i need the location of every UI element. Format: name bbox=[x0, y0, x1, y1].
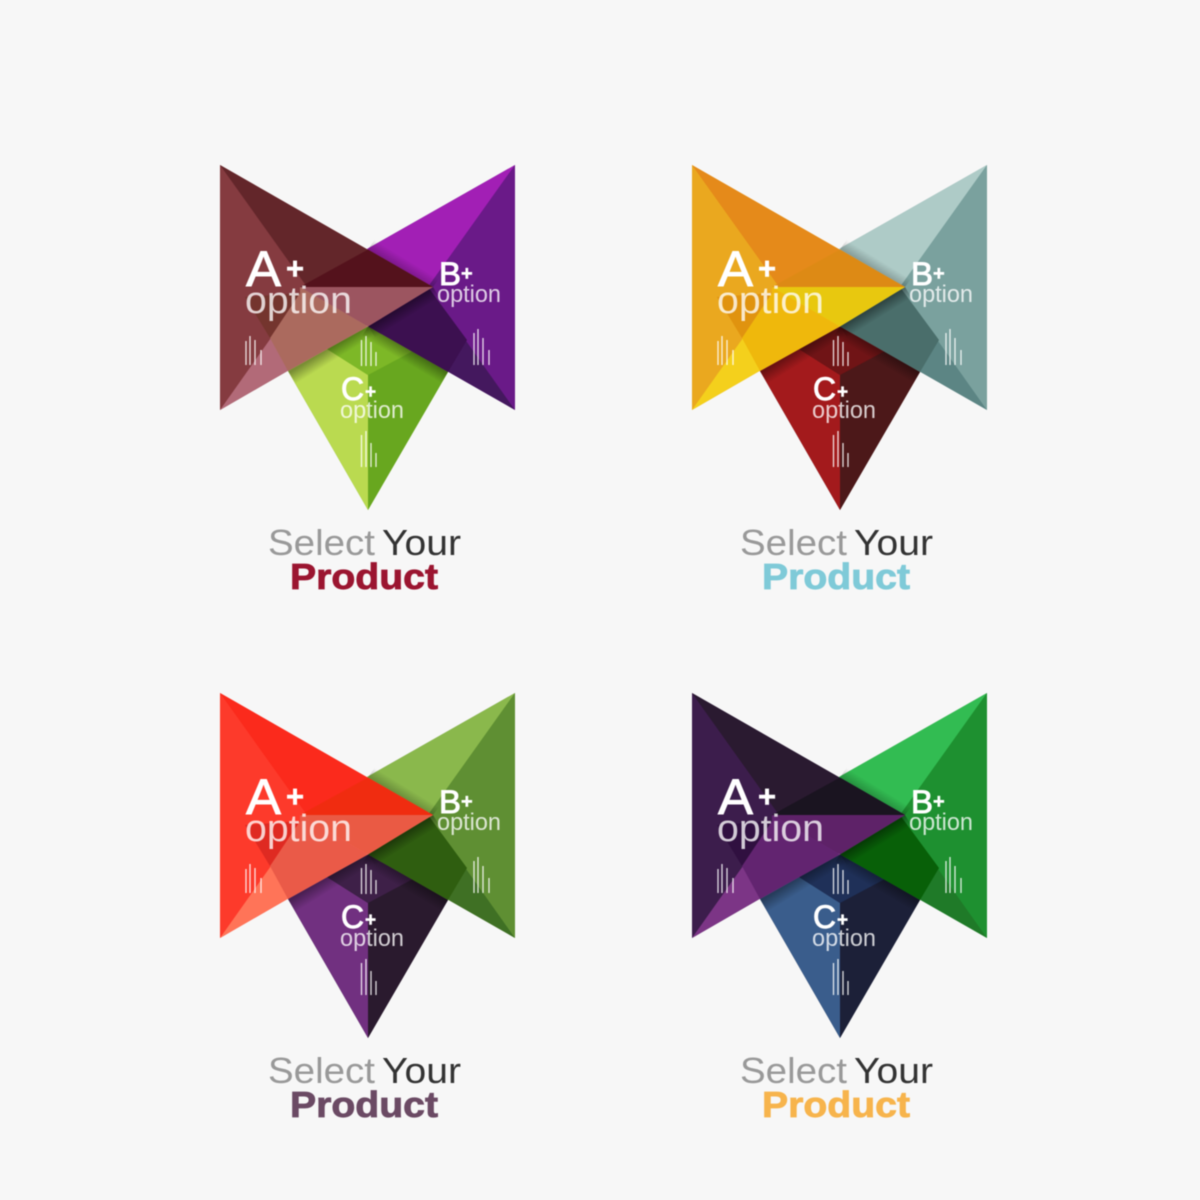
label: C+ option: option bbox=[812, 925, 876, 952]
label: C+ option: option bbox=[340, 397, 404, 424]
label: B+ option: option bbox=[909, 809, 973, 836]
mini bars: A bbox=[718, 336, 733, 365]
label: A+ option bbox=[717, 769, 824, 850]
mini bars: B bbox=[474, 329, 489, 365]
label: B+ option: B bbox=[911, 256, 933, 292]
label: C+ option bbox=[340, 371, 404, 424]
label: B+ option: B bbox=[439, 256, 461, 292]
label: A+ option: option bbox=[717, 280, 824, 322]
label: C+ option: C bbox=[813, 899, 836, 935]
label: A+ option: A bbox=[718, 241, 754, 297]
label: C+ option: option bbox=[812, 397, 876, 424]
label: A+ option bbox=[245, 241, 352, 322]
label: B+ option: + bbox=[461, 263, 473, 285]
label: A+ option: + bbox=[758, 251, 776, 286]
heading: Select Your Product: Your bbox=[854, 1050, 933, 1091]
label: B+ option bbox=[909, 784, 973, 836]
mini bars: A bbox=[246, 864, 261, 893]
panel: violet green blue option diagram bbox=[692, 693, 987, 1125]
label: A+ option: A bbox=[718, 769, 754, 825]
heading: Select Your Product: Select bbox=[268, 522, 375, 563]
heading: Select Your Product: Your bbox=[382, 522, 461, 563]
heading: Select Your Product: Select bbox=[740, 1050, 847, 1091]
diagram shapes: folded triangles bbox=[220, 693, 515, 1038]
panel: orange teal red option diagram bbox=[692, 165, 987, 597]
panel: maroon purple green option diagram bbox=[220, 165, 515, 597]
label: A+ option: + bbox=[286, 251, 304, 286]
label: C+ option: + bbox=[837, 910, 848, 931]
heading: Select Your Product: Select bbox=[740, 522, 847, 563]
label: B+ option: + bbox=[933, 791, 945, 813]
label: C+ option bbox=[812, 899, 876, 952]
label: A+ option bbox=[717, 241, 824, 322]
label: B+ option: option bbox=[909, 281, 973, 308]
diagram shapes: folded triangles bbox=[692, 165, 987, 510]
heading: Select Your Product: Select bbox=[268, 1050, 375, 1091]
mini bars: C bbox=[362, 431, 376, 467]
label: B+ option: + bbox=[933, 263, 945, 285]
label: B+ option: B bbox=[439, 784, 461, 820]
heading: Select Your Product bbox=[268, 522, 461, 597]
label: A+ option: A bbox=[246, 241, 282, 297]
label: B+ option bbox=[437, 256, 501, 308]
label: C+ option bbox=[340, 899, 404, 952]
mini bars: centre bbox=[362, 864, 376, 894]
label: C+ option: C bbox=[813, 371, 836, 407]
label: A+ option bbox=[245, 769, 352, 850]
label: A+ option: option bbox=[245, 280, 352, 322]
label: B+ option bbox=[437, 784, 501, 836]
label: B+ option: option bbox=[437, 809, 501, 836]
mini bars: B bbox=[474, 857, 489, 893]
label: A+ option: option bbox=[245, 808, 352, 850]
mini bars: C bbox=[834, 959, 848, 995]
label: B+ option: option bbox=[437, 281, 501, 308]
mini bars: A bbox=[246, 336, 261, 365]
label: C+ option: C bbox=[341, 899, 364, 935]
label: B+ option: + bbox=[461, 791, 473, 813]
label: C+ option bbox=[812, 371, 876, 424]
label: C+ option: C bbox=[341, 371, 364, 407]
heading: Select Your Product: Your bbox=[854, 522, 933, 563]
mini bars: centre bbox=[834, 864, 848, 894]
heading: Select Your Product bbox=[268, 1050, 461, 1125]
mini bars: B bbox=[946, 857, 961, 893]
label: A+ option: + bbox=[286, 779, 304, 814]
label: C+ option: + bbox=[837, 382, 848, 403]
panel: red green violet option diagram bbox=[220, 693, 515, 1125]
heading: Select Your Product: Product bbox=[290, 1084, 438, 1125]
diagram shapes: folded triangles bbox=[692, 693, 987, 1038]
label: C+ option: + bbox=[365, 910, 376, 931]
mini bars: C bbox=[362, 959, 376, 995]
mini bars: C bbox=[834, 431, 848, 467]
diagram shapes: folded triangles bbox=[220, 165, 515, 510]
heading: Select Your Product: Your bbox=[382, 1050, 461, 1091]
heading: Select Your Product bbox=[740, 522, 933, 597]
heading: Select Your Product: Product bbox=[762, 1084, 910, 1125]
label: A+ option: option bbox=[717, 808, 824, 850]
heading: Select Your Product: Product bbox=[290, 556, 438, 597]
heading: Select Your Product bbox=[740, 1050, 933, 1125]
mini bars: A bbox=[718, 864, 733, 893]
label: C+ option: option bbox=[340, 925, 404, 952]
label: A+ option: + bbox=[758, 779, 776, 814]
heading: Select Your Product: Product bbox=[762, 556, 910, 597]
mini bars: centre bbox=[834, 336, 848, 366]
label: B+ option bbox=[909, 256, 973, 308]
label: B+ option: B bbox=[911, 784, 933, 820]
label: A+ option: A bbox=[246, 769, 282, 825]
label: C+ option: + bbox=[365, 382, 376, 403]
mini bars: B bbox=[946, 329, 961, 365]
mini bars: centre bbox=[362, 336, 376, 366]
